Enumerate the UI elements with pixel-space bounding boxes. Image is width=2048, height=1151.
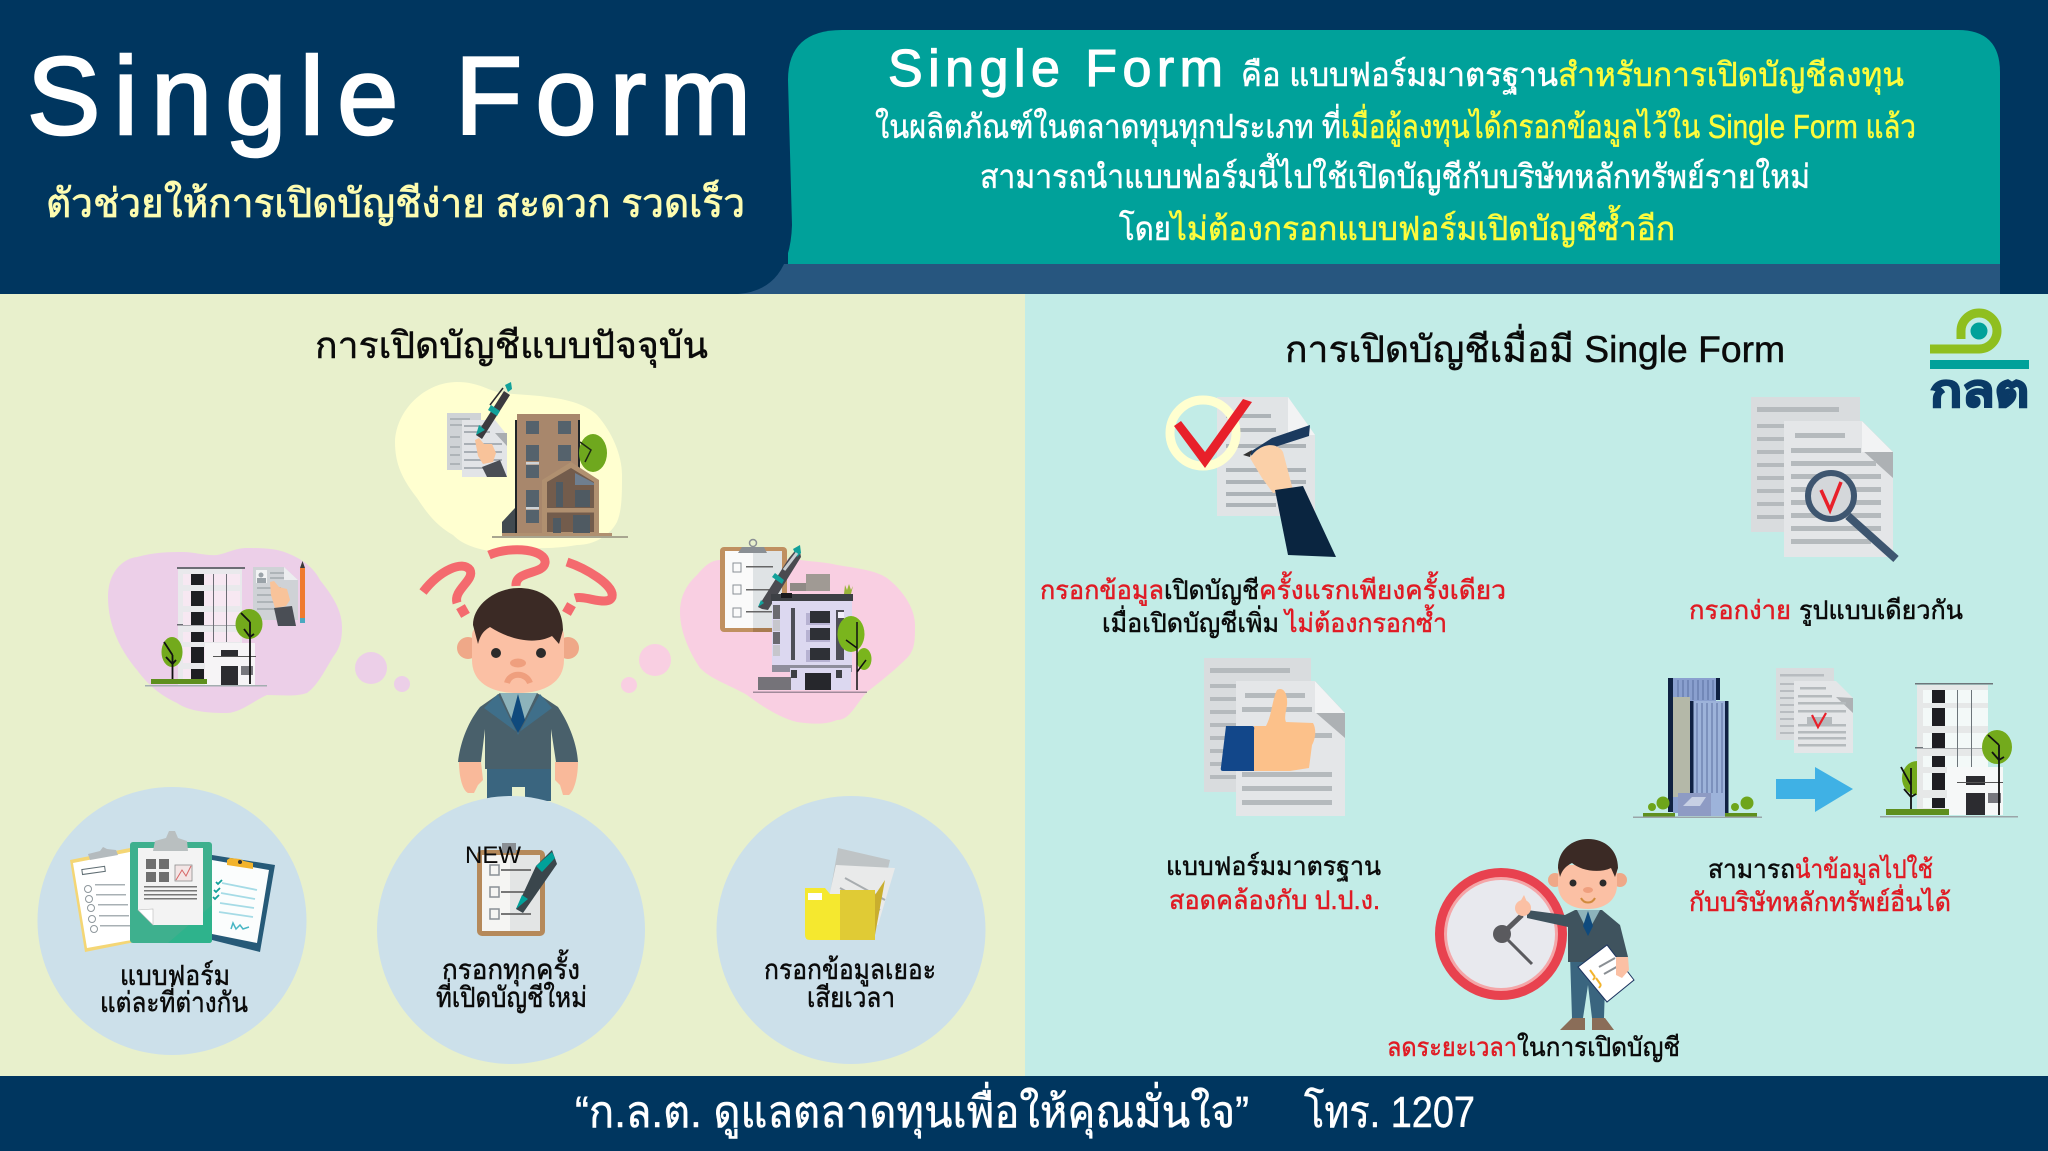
caption: ไม่ต้องกรอกซ้ำ [1283, 604, 1447, 638]
background: navy header [0, 0, 2048, 294]
icon: clipboard and pen [477, 843, 557, 936]
caption: สามารถ [1708, 854, 1795, 884]
thought blob: yellow [395, 382, 622, 551]
icon: three clipboards [70, 831, 275, 952]
panel: with Single Form [1025, 294, 2048, 1076]
definition text: Single Form [888, 40, 1223, 98]
caption: กรอกทุกครั้ง [442, 949, 580, 987]
caption [100, 960, 248, 1018]
definition text: เมื่อผู้ลงทุนได้กรอกข้อมูลไว้ใน Single Form แล้ว [1341, 104, 1916, 147]
subtitle: ตัวช่วยให้การเปิดบัญชีง่าย สะดวก รวดเร็ว [46, 179, 745, 226]
caption: ลดระยะเวลา [1387, 1032, 1517, 1062]
caption: แบบฟอร์ม [120, 960, 230, 991]
caption [436, 949, 587, 1013]
icon: clipboard and lavender building (right) [720, 540, 872, 693]
caption: นำข้อมูลไปใช้ [1795, 854, 1933, 885]
caption: เปิดบัญชี [1164, 575, 1259, 605]
caption [1689, 595, 1963, 626]
heading: with Single Form: การเปิดบัญชีเมื่อมี Single Form [1285, 323, 1785, 371]
icon: SEC logo [1930, 313, 2029, 416]
circle: lots of data [716, 796, 986, 1064]
footer band [0, 1076, 2048, 1151]
caption [1166, 851, 1381, 915]
caption: กรอกข้อมูลเยอะ [764, 954, 936, 987]
definition text: สำหรับการเปิดบัญชีลงทุน [1558, 56, 1904, 95]
caption [1689, 854, 1951, 917]
illustration: man with clock [1435, 839, 1634, 1030]
caption [1040, 571, 1506, 638]
title: Single Form [27, 35, 751, 158]
definition text: ในผลิตภัณฑ์ในตลาดทุนทุกประเภท ที่ [875, 104, 1341, 147]
definition text: โดย [1119, 210, 1171, 247]
thought bubbles left [355, 652, 410, 692]
icon: tower [1633, 678, 1762, 818]
icon: document with check and hand [1170, 397, 1336, 557]
icon: document with check [1776, 668, 1853, 753]
caption: ครั้งแรกเพียงครั้งเดียว [1259, 571, 1506, 605]
band under definition panel [730, 264, 2000, 294]
caption: แต่ละที่ต่างกัน [100, 983, 248, 1018]
label NEW: NEW [465, 842, 521, 869]
thought blob: left purple [108, 548, 342, 713]
thought blob: right pink [680, 557, 915, 724]
icon: white building with form (left) [145, 561, 305, 686]
caption: กรอกข้อมูล [1040, 575, 1164, 606]
icon: white building [1880, 683, 2018, 818]
heading: current process: การเปิดบัญชีแบบปัจจุบัน [315, 325, 708, 368]
caption: ในการเปิดบัญชี [1517, 1032, 1680, 1062]
icon: building with form (top) [447, 382, 628, 538]
title panel shape [0, 0, 792, 294]
icon: documents with magnifier [1751, 397, 1896, 559]
circle: different forms [38, 787, 306, 1055]
definition text [875, 40, 1916, 247]
caption: เมื่อเปิดบัญชีเพิ่ม [1102, 605, 1279, 638]
circle: fill in every time [377, 796, 645, 1064]
footer slogan: “ก.ล.ต. ดูแลตลาดทุนเพื่อให้คุณมั่นใจ” [575, 1081, 1249, 1139]
arrow [1776, 767, 1853, 812]
caption: แบบฟอร์มมาตรฐาน [1166, 851, 1381, 882]
caption [764, 954, 936, 1013]
illustration: confused man [457, 588, 579, 801]
panel: definition background [788, 30, 2000, 264]
caption: เสียเวลา [807, 982, 895, 1013]
icon: documents with thumbs up [1204, 658, 1345, 816]
caption: กรอกง่าย [1689, 595, 1791, 625]
icon: folder with papers [805, 848, 895, 940]
footer phone: โทร. 1207 [1304, 1087, 1475, 1137]
panel: current process [0, 294, 1025, 1076]
caption: สอดคล้องกับ ป.ป.ง. [1169, 885, 1380, 915]
icon: tower, document, arrow, building [1633, 668, 2018, 818]
icon: question marks [423, 550, 612, 618]
definition text: คือ แบบฟอร์มมาตรฐาน [1241, 56, 1558, 95]
caption: กับบริษัทหลักทรัพย์อื่นได้ [1689, 884, 1951, 917]
caption [1387, 1032, 1680, 1062]
icon: SEC logo: กลต [1930, 367, 2029, 416]
definition text: ไม่ต้องกรอกแบบฟอร์มเปิดบัญชีซ้ำอีก [1168, 205, 1675, 247]
thought bubbles right [621, 644, 671, 693]
caption: ที่เปิดบัญชีใหม่ [436, 978, 587, 1013]
definition text: สามารถนำแบบฟอร์มนี้ไปใช้เปิดบัญชีกับบริษัทหลักทรัพย์รายใหม่ [980, 153, 1810, 195]
caption: รูปแบบเดียวกัน [1799, 595, 1963, 626]
